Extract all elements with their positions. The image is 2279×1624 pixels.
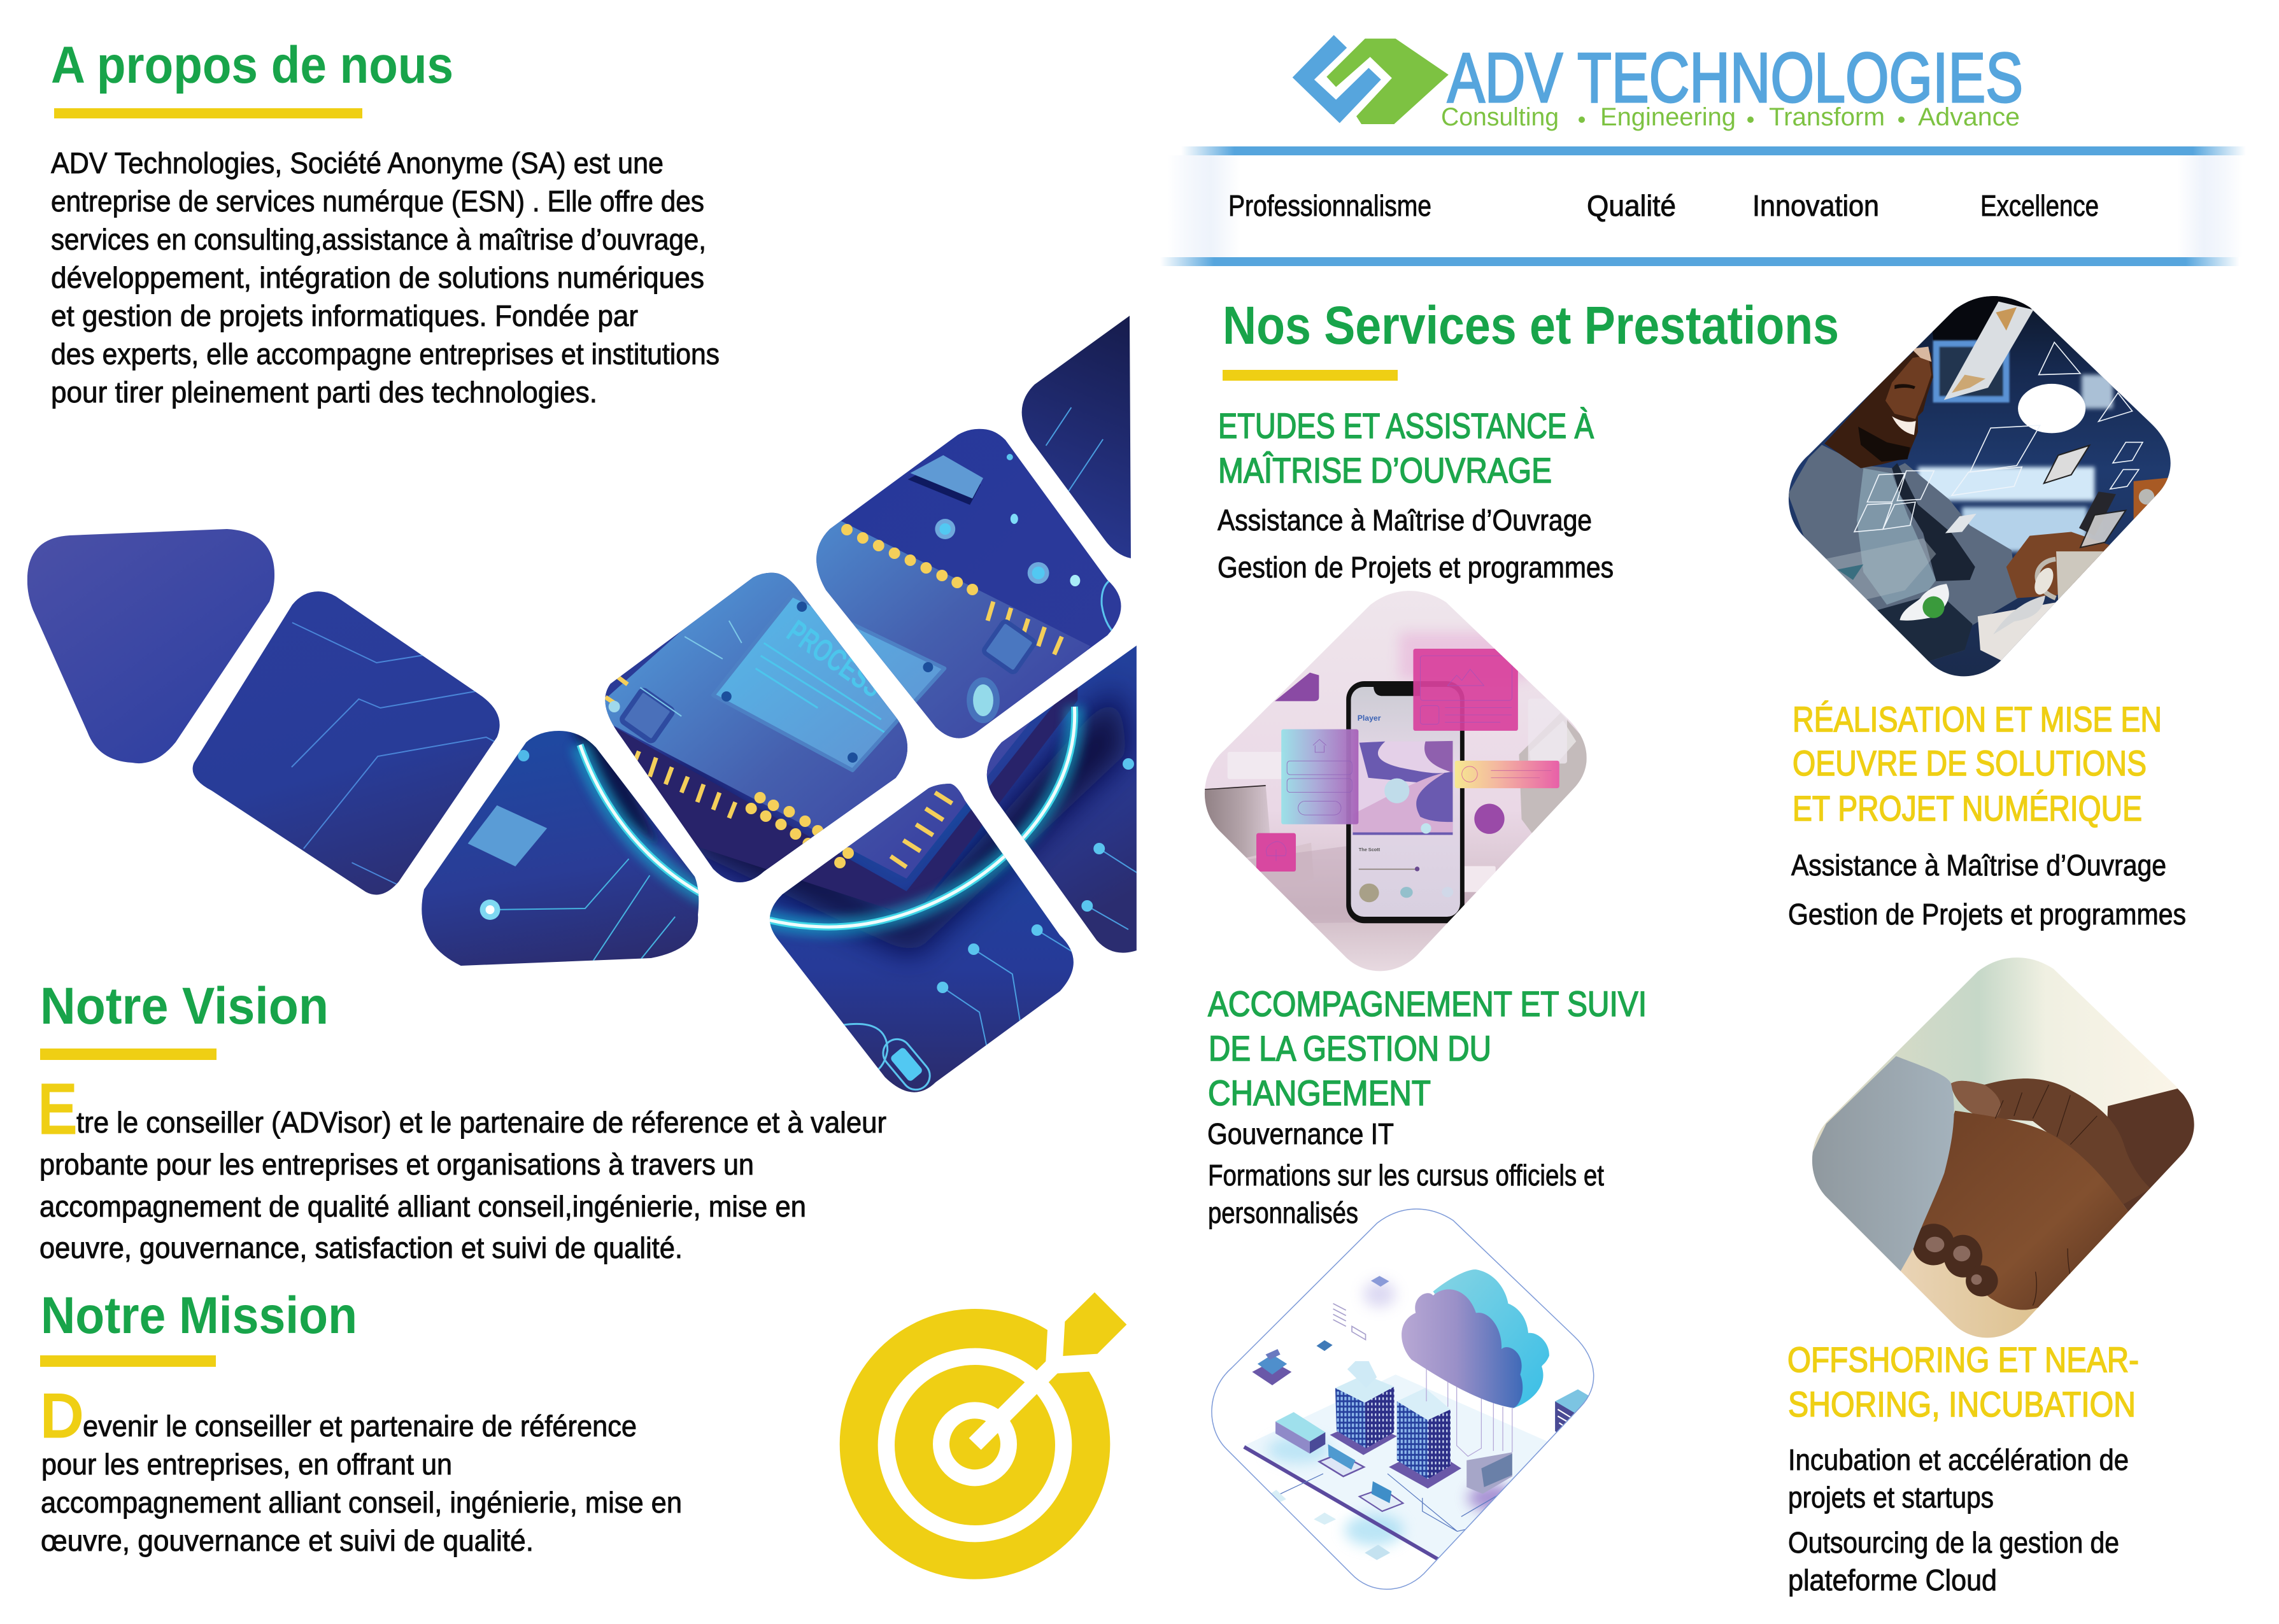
tile 3 bbox=[422, 731, 699, 966]
text block: mission paragraph: evenir le conseiller et partenaire de référence bbox=[83, 1409, 637, 1443]
value: Professionnalisme: Professionnalisme bbox=[1228, 189, 1431, 222]
tile 4 bbox=[605, 573, 908, 882]
values banner bbox=[1160, 146, 2246, 266]
text block: mission paragraph: pour les entreprises, en offrant un bbox=[41, 1448, 452, 1481]
text block: about paragraph: ADV Technologies, Société Anonyme (SA) est une bbox=[51, 146, 664, 180]
value: Excellence: Excellence bbox=[1980, 189, 2099, 222]
service 1: études et assistance: ETUDES ET ASSISTANCE À bbox=[1218, 406, 1594, 446]
service 1: études et assistance: Assistance à Maîtrise d’Ouvrage bbox=[1218, 504, 1592, 537]
service 3: accompagnement: Gouvernance IT bbox=[1207, 1117, 1394, 1150]
yellow underline: Mission bbox=[40, 1355, 216, 1367]
service 4: offshoring: Incubation et accélération de bbox=[1788, 1443, 2129, 1476]
logo icon bbox=[1293, 35, 1449, 124]
section title: Nos Services et Prestations: Nos Services et Prestations bbox=[1223, 295, 1839, 355]
logo tagline: Engineering bbox=[1600, 103, 1736, 131]
tile 7 bbox=[769, 784, 1074, 1092]
text block: vision paragraph bbox=[38, 1070, 886, 1264]
text block: about paragraph: et gestion de projets informatiques. Fondée par bbox=[51, 299, 638, 332]
service 2: réalisation: RÉALISATION ET MISE EN bbox=[1793, 699, 2162, 739]
service 4: offshoring bbox=[1787, 1339, 2139, 1597]
circuit mosaic illustration bbox=[0, 312, 1141, 1096]
yellow underline: A propos bbox=[54, 108, 362, 118]
service 2: réalisation: Assistance à Maîtrise d’Ouvrage bbox=[1791, 849, 2166, 882]
service 2: réalisation: OEUVRE DE SOLUTIONS bbox=[1793, 743, 2147, 783]
text block: vision paragraph: tre le conseiller (ADVisor) et le partenaire de réference et à valeur bbox=[76, 1106, 886, 1139]
text block: mission paragraph: accompagnement alliant conseil, ingénierie, mise en bbox=[41, 1486, 682, 1519]
text block: mission paragraph: œuvre, gouvernance et suivi de qualité. bbox=[41, 1524, 534, 1557]
service 1: études et assistance: MAÎTRISE D’OUVRAGE bbox=[1218, 450, 1552, 490]
tile 8 bbox=[987, 646, 1137, 953]
service 4: offshoring: projets et startups bbox=[1788, 1481, 1994, 1514]
service 2: réalisation bbox=[1788, 699, 2186, 931]
text block: mission paragraph bbox=[41, 1382, 682, 1557]
value: Innovation: Innovation bbox=[1752, 189, 1879, 222]
text block: vision paragraph: probante pour les entreprises et organisations à travers un bbox=[39, 1148, 754, 1181]
service 4: offshoring: Outsourcing de la gestion de bbox=[1788, 1526, 2119, 1559]
yellow underline: Services bbox=[1223, 370, 1398, 381]
yellow underline: Vision bbox=[40, 1049, 217, 1060]
logo tagline: Transform bbox=[1769, 103, 1885, 131]
logo tagline: Advance bbox=[1918, 103, 2020, 131]
tile 2 bbox=[192, 591, 500, 895]
logo: ADV Technologies bbox=[1293, 35, 2023, 131]
text block: vision paragraph: E bbox=[38, 1070, 76, 1147]
logo wordmark: ADV TECHNOLOGIES bbox=[1447, 39, 2023, 117]
section title: Notre Vision: Notre Vision bbox=[40, 977, 329, 1035]
section title: A propos de nous: A propos de nous bbox=[51, 36, 453, 94]
service 3: accompagnement: Formations sur les cursus officiels et bbox=[1208, 1159, 1604, 1192]
text block: about paragraph: services en consulting,assistance à maîtrise d’ouvrage, bbox=[51, 223, 706, 256]
text block: vision paragraph: oeuvre, gouvernance, satisfaction et suivi de qualité. bbox=[39, 1231, 683, 1264]
tile 5 bbox=[816, 429, 1121, 738]
tile 6 bbox=[1021, 316, 1131, 558]
text block: about paragraph: pour tirer pleinement parti des technologies. bbox=[51, 376, 597, 409]
photo: smartphone app interface: Player bbox=[1358, 714, 1381, 723]
service 1: études et assistance: Gestion de Projets et programmes bbox=[1218, 551, 1614, 584]
service 2: réalisation: Gestion de Projets et programmes bbox=[1788, 898, 2186, 931]
service 1: études et assistance bbox=[1218, 406, 1614, 584]
value: Qualité: Qualité bbox=[1587, 189, 1676, 222]
logo tagline: Consulting bbox=[1441, 103, 1559, 131]
tile 1 bbox=[27, 529, 274, 764]
photo: smartphone app interface bbox=[1205, 591, 1587, 971]
service 4: offshoring: OFFSHORING ET NEAR- bbox=[1787, 1339, 2139, 1380]
text block: mission paragraph: D bbox=[41, 1382, 83, 1449]
text block: about paragraph: entreprise de services numérque (ESN) . Elle offre des bbox=[51, 185, 704, 218]
diamond outline bbox=[1212, 1209, 1594, 1589]
illustration: cloud data center bbox=[1211, 1208, 1594, 1590]
photo: man with floating screens bbox=[1788, 296, 2171, 676]
service 3: accompagnement: DE LA GESTION DU bbox=[1209, 1028, 1491, 1068]
service 3: accompagnement bbox=[1207, 984, 1647, 1229]
service 4: offshoring: SHORING, INCUBATION bbox=[1788, 1384, 2136, 1424]
text block: about paragraph: développement, intégration de solutions numériques bbox=[51, 261, 704, 294]
photo: smartphone app interface: The Scott bbox=[1359, 847, 1381, 852]
text block: about paragraph bbox=[51, 146, 720, 409]
service 2: réalisation: ET PROJET NUMÉRIQUE bbox=[1793, 788, 2142, 828]
text block: vision paragraph: accompagnement de qualité alliant conseil,ingénierie, mise en bbox=[39, 1190, 806, 1223]
logo tagline bbox=[1441, 103, 2020, 131]
service 4: offshoring: plateforme Cloud bbox=[1788, 1564, 1997, 1597]
icon: target with arrow bbox=[840, 1290, 1142, 1579]
service 3: accompagnement: CHANGEMENT bbox=[1208, 1073, 1431, 1113]
service 3: accompagnement: ACCOMPAGNEMENT ET SUIVI bbox=[1208, 984, 1647, 1024]
photo: handshake bbox=[1812, 957, 2194, 1338]
text block: about paragraph: des experts, elle accompagne entreprises et institutions bbox=[51, 337, 720, 371]
section title: Notre Mission: Notre Mission bbox=[41, 1287, 357, 1345]
service 3: accompagnement: personnalisés bbox=[1208, 1196, 1358, 1229]
